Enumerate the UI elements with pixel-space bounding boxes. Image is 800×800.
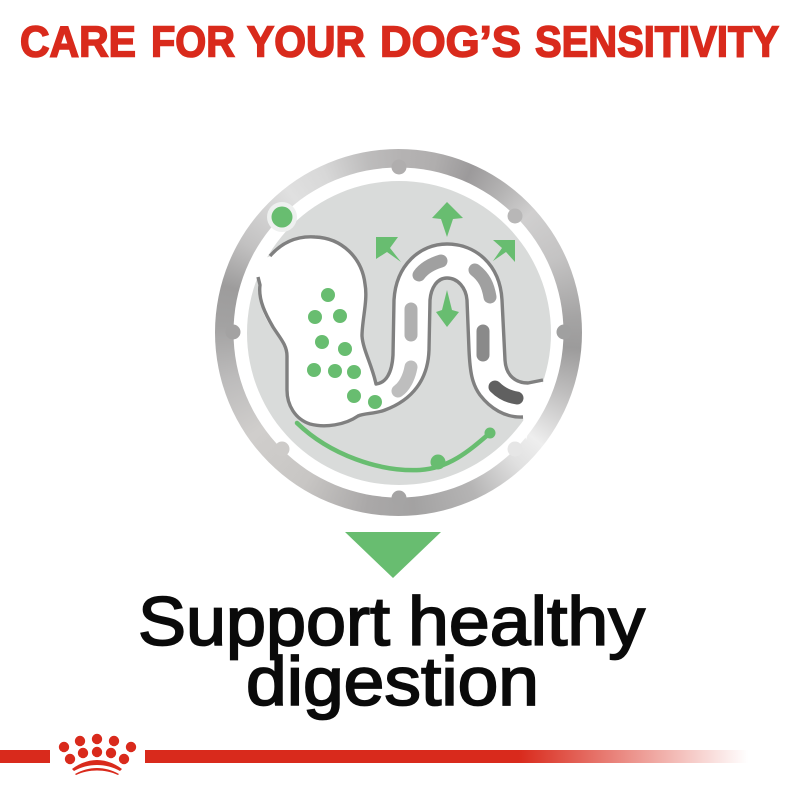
digestive tract white fill	[247, 237, 543, 440]
footer bar left	[0, 750, 50, 763]
green down triangle	[345, 532, 441, 578]
title: FOR	[151, 18, 235, 66]
digestion icon	[226, 160, 572, 506]
title: YOUR	[247, 18, 365, 66]
heading: healthy	[408, 583, 646, 660]
title: SENSITIVITY	[535, 18, 779, 66]
heading	[138, 583, 646, 720]
crown logo	[59, 734, 136, 775]
title: DOG’S	[380, 18, 521, 66]
green dot on ring	[267, 202, 297, 232]
green particles	[307, 288, 382, 409]
stomach and intestine outline	[258, 237, 543, 426]
metallic ring	[215, 149, 582, 516]
green arc with nodes	[297, 423, 496, 470]
grey disc	[247, 181, 551, 485]
white gap inside ring	[234, 168, 564, 498]
heading: Support	[138, 583, 390, 660]
intestine dashes	[398, 261, 517, 398]
title	[20, 18, 779, 66]
heading: digestion	[246, 643, 539, 720]
footer bar right	[145, 750, 748, 763]
green arrows	[376, 202, 515, 327]
title: CARE	[20, 18, 136, 66]
ring notches	[226, 160, 572, 506]
